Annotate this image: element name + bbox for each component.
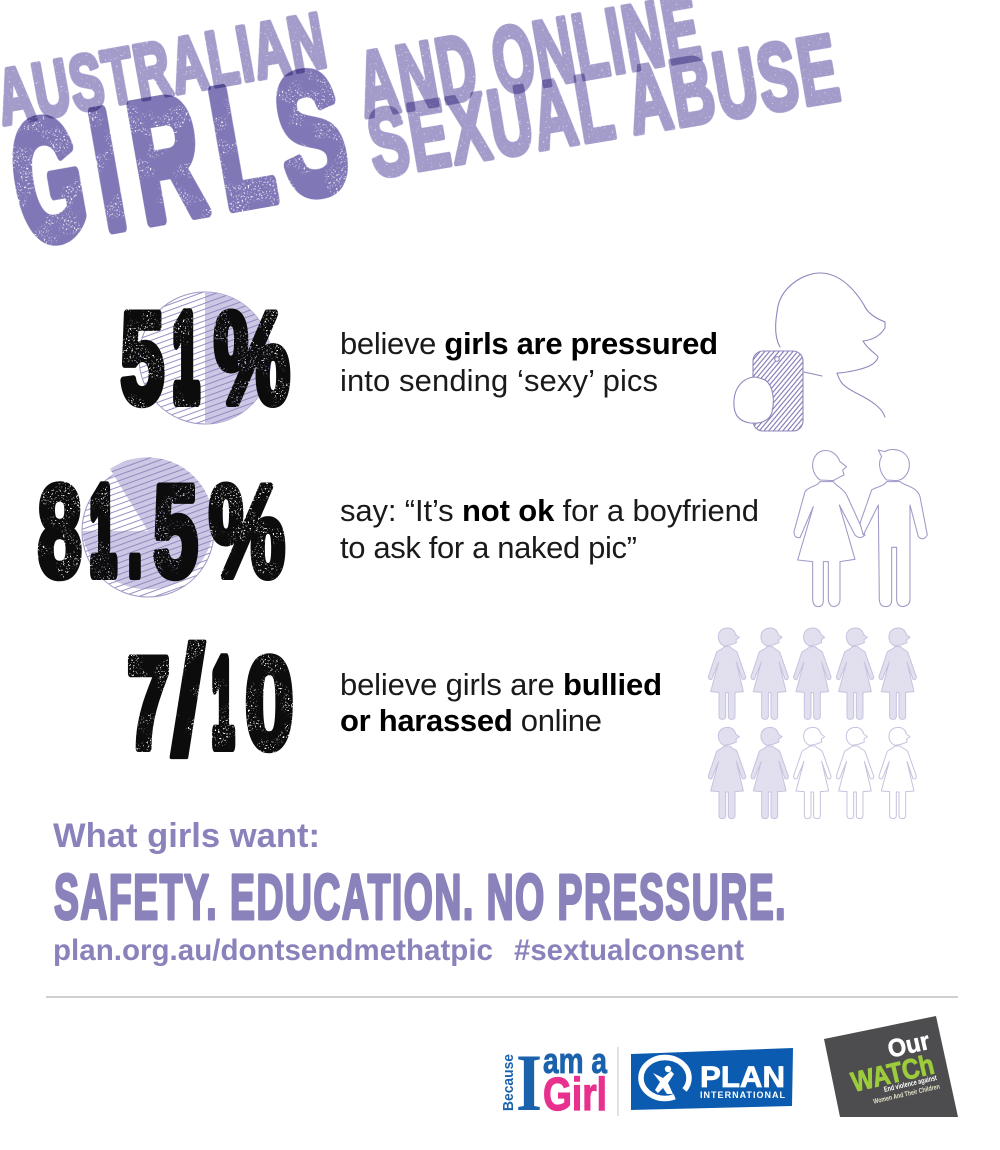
logo: because I am a girl: I: [516, 1037, 542, 1128]
statistic: 81.5%: 1: [90, 462, 116, 598]
woman: [794, 450, 865, 607]
logo: Plan International: [631, 1048, 793, 1110]
text: bullied or harassed: or harassed online: [340, 703, 602, 738]
statistic: 51%: 5: [120, 285, 164, 431]
text: bullied or harassed: [340, 667, 662, 738]
text: girls are pressured: believe girls are pressured: [340, 326, 718, 361]
shaded girls: [708, 628, 916, 819]
title line: Girls: S: [263, 35, 359, 233]
statistic: 81.5%: .: [127, 458, 143, 604]
logo: Our Watch: End violence against: [883, 1073, 938, 1094]
logo: Plan International: INTERNATIONAL: [700, 1090, 786, 1100]
stat row: 7/10: [127, 614, 916, 819]
text: bullied or harassed: believe girls are bullied: [340, 667, 662, 702]
logo: Our Watch: Women And Their Children: [873, 1084, 941, 1106]
outline girls: [794, 727, 916, 819]
logo: Our Watch: [824, 1016, 958, 1117]
icon: girl and boy holding hands: [794, 449, 927, 607]
links: #sextualconsent: [514, 934, 744, 967]
statistic: 7/10: 7: [127, 630, 170, 776]
statistic: 7/10: 1: [212, 634, 234, 770]
statistic: 51%: 1: [173, 290, 199, 426]
statistic: 7/10: /: [170, 614, 206, 787]
text: not ok: say: “It’s not ok for a boyfriend: [340, 493, 759, 528]
statistic: 81.5%: %: [209, 458, 285, 604]
text: girls are pressured: [340, 326, 718, 398]
text: not ok: [340, 493, 759, 565]
logo: Plan International: PLAN: [700, 1061, 785, 1094]
pie chart: 81.5 percent: [82, 457, 214, 597]
man: [860, 449, 927, 607]
statistic: 7/10: 0: [245, 630, 294, 776]
logo: because I am a girl: am a: [543, 1040, 608, 1081]
logo: because I am a girl: Girl: [543, 1068, 607, 1120]
logo: Our Watch: WATCh: [848, 1049, 937, 1098]
statistic: 81.5%: 8: [38, 458, 82, 604]
statistic: 51%: %: [214, 285, 290, 431]
statistic: 81.5%: 5: [153, 458, 198, 604]
title line: Girls: R: [118, 60, 216, 259]
title line: Girls: G: [0, 81, 98, 280]
heading: what girls want: What girls want:: [53, 817, 320, 855]
links: [53, 934, 744, 967]
links: plan.org.au/dontsendmethatpic: [53, 934, 493, 967]
text: not ok: to ask for a naked pic”: [340, 530, 637, 565]
icon: girl with phone: [734, 273, 885, 431]
logo: because I am a girl: Because: [501, 1054, 517, 1111]
title line: Girls: I: [79, 75, 136, 266]
text: girls are pressured: into sending ‘sexy’ pics: [340, 363, 658, 398]
logo: because I am a girl: [501, 1037, 608, 1128]
stat row: 81.5%: [38, 449, 927, 607]
pie chart: 51 percent: [139, 292, 271, 424]
logo: Our Watch: Our: [885, 1027, 933, 1064]
stat row: 51%: [120, 273, 885, 431]
pictogram: 7 of 10 girls: [708, 628, 916, 819]
title line: Girls: L: [199, 48, 285, 245]
call to action: [53, 817, 787, 967]
title: [0, 0, 848, 280]
